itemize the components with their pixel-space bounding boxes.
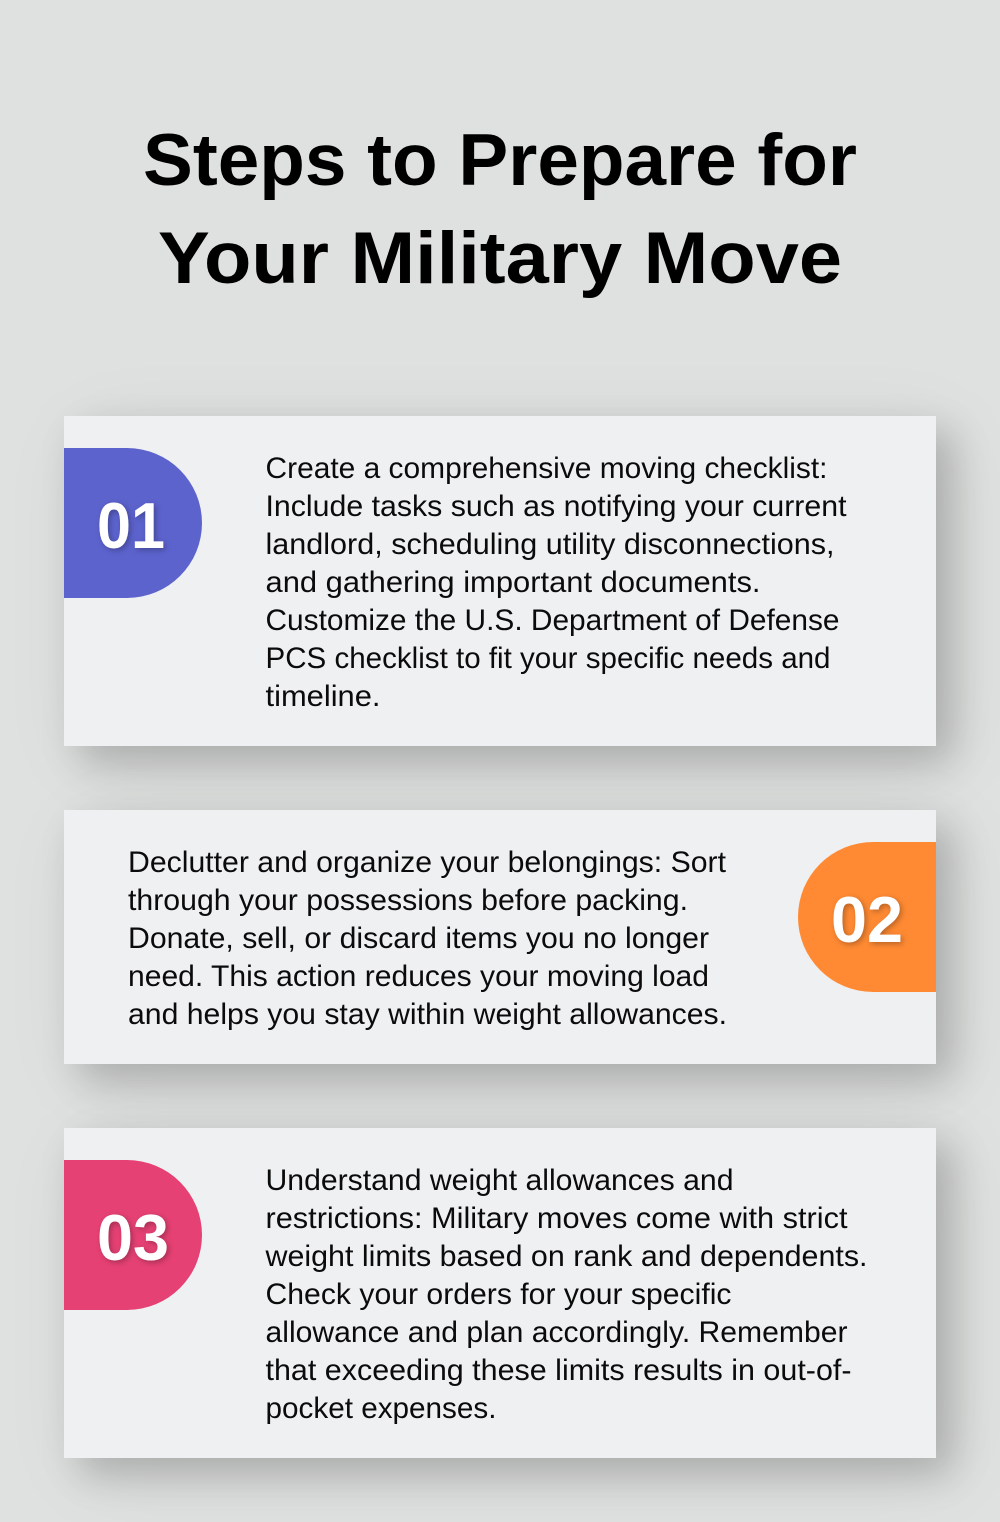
text block: step 3: allowance and plan accordingly. Remember (266, 1316, 848, 1349)
text block: step 1: timeline. (266, 680, 380, 713)
text block: step 3: pocket expenses. (266, 1392, 496, 1425)
badge: 03: 03 (97, 1201, 169, 1274)
panel: step 2 card (64, 810, 936, 1064)
badge: 03 (64, 1160, 202, 1310)
badge: 01: 01 (97, 489, 165, 562)
text block: step 2: and helps you stay within weight allowances. (128, 998, 727, 1031)
text block: step 3: Check your orders for your specific (266, 1278, 732, 1311)
text block: step 1: and gathering important documents. (266, 566, 760, 599)
text block: step 3: restrictions: Military moves come with strict (266, 1202, 848, 1235)
badge: 02 (798, 842, 936, 992)
text block: step 2: Declutter and organize your belongings: Sort (128, 846, 726, 879)
text block: step 3: weight limits based on rank and dependents. (264, 1240, 868, 1273)
title: Steps to Prepare for (143, 120, 857, 201)
badge: 02: 02 (831, 883, 903, 956)
text block: step 2: need. This action reduces your moving load (128, 960, 709, 993)
text block: step 3: Understand weight allowances and (266, 1164, 733, 1197)
text block: step 2: through your possessions before packing. (128, 884, 688, 917)
text block: step 3: that exceeding these limits results in out-of- (266, 1354, 852, 1387)
text block: step 1 (266, 452, 846, 713)
text block: step 1: Create a comprehensive moving checklist: (266, 452, 828, 485)
panel: step 1 card (64, 416, 936, 746)
title (143, 120, 857, 299)
text block: step 1: PCS checklist to fit your specific needs and (266, 642, 830, 675)
text block: step 1: landlord, scheduling utility disconnections, (266, 528, 834, 561)
panel: step 3 card (64, 1128, 936, 1458)
text block: step 3 (264, 1164, 868, 1425)
text block: step 1: Include tasks such as notifying your current (266, 490, 846, 523)
text block: step 2: Donate, sell, or discard items you no longer (128, 922, 709, 955)
text block: step 2 (128, 846, 727, 1031)
title: Your Military Move (158, 218, 842, 299)
badge: 01 (64, 448, 202, 598)
text block: step 1: Customize the U.S. Department of Defense (266, 604, 839, 637)
